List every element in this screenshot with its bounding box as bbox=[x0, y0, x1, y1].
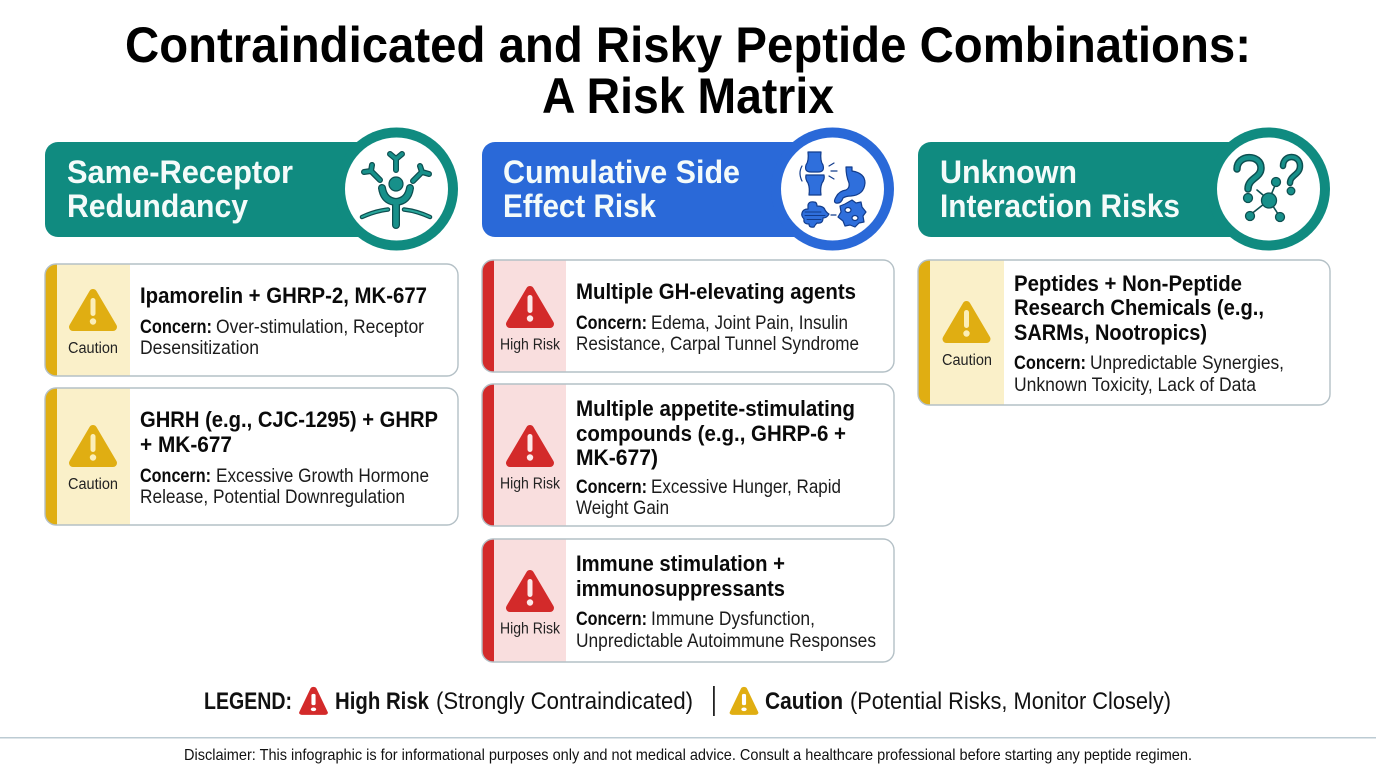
icon: question marks and molecule bbox=[1237, 157, 1300, 222]
card: GHRH + GHRP + MK-677: Excessive Growth Hormone bbox=[216, 466, 429, 487]
card: GHRH + GHRP + MK-677: GHRH (e.g., CJC-1295) + GHRP bbox=[140, 407, 438, 432]
card: GHRH + GHRP + MK-677: + MK-677 bbox=[140, 432, 232, 457]
card: GHRH + GHRP + MK-677 bbox=[45, 388, 458, 525]
panel: unknown interaction risks bbox=[918, 128, 1330, 405]
title bbox=[125, 17, 1251, 124]
card: peptides + non-peptide research chemicals: Unpredictable Synergies, bbox=[1090, 353, 1284, 374]
heading: unknown interaction risks: Interaction Risks bbox=[940, 188, 1180, 224]
card: immune stimulation + immunosuppressants: Immune stimulation + bbox=[576, 551, 785, 576]
card: multiple GH-elevating agents: Concern: bbox=[576, 313, 647, 334]
card: multiple appetite-stimulating compounds bbox=[482, 384, 894, 526]
card: peptides + non-peptide research chemicals: Unknown Toxicity, Lack of Data bbox=[1014, 375, 1256, 396]
legend: (Strongly Contraindicated) bbox=[436, 688, 693, 715]
icon: caution triangle bbox=[73, 429, 113, 463]
card: immune stimulation + immunosuppressants: immunosuppressants bbox=[576, 576, 785, 601]
title: Contraindicated and Risky Peptide Combinations: bbox=[125, 17, 1251, 73]
icon: joint, stomach, intestine and cell bbox=[800, 152, 866, 227]
legend: (Potential Risks, Monitor Closely) bbox=[850, 688, 1171, 715]
card: peptides + non-peptide research chemicals: SARMs, Nootropics) bbox=[1014, 320, 1207, 345]
card: Ipamorelin + GHRP-2, MK-677: Desensitization bbox=[140, 338, 259, 359]
card: Ipamorelin + GHRP-2, MK-677 bbox=[45, 264, 458, 376]
card: multiple GH-elevating agents: Multiple GH-elevating agents bbox=[576, 279, 856, 304]
disclaimer: Disclaimer: This infographic is for informational purposes only and not medical advice. Consult a healthcare professional before starting any peptide regimen. bbox=[184, 747, 1192, 764]
icon: high risk legend triangle bbox=[302, 689, 325, 713]
icon: high risk triangle bbox=[510, 574, 550, 608]
card: multiple GH-elevating agents: High Risk bbox=[500, 336, 560, 354]
heading: unknown interaction risks bbox=[918, 128, 1330, 250]
card: multiple GH-elevating agents: Edema, Joint Pain, Insulin bbox=[651, 313, 848, 334]
icon: high risk triangle bbox=[510, 290, 550, 324]
heading: same-receptor redundancy: Same-Receptor bbox=[67, 154, 293, 190]
card: peptides + non-peptide research chemicals: Caution bbox=[942, 352, 992, 369]
icon: receptor with binding ligands bbox=[362, 154, 430, 225]
heading: cumulative side effect risk: Cumulative Side bbox=[503, 154, 740, 190]
icon: caution legend triangle bbox=[733, 689, 755, 713]
card: immune stimulation + immunosuppressants bbox=[482, 539, 894, 662]
card: immune stimulation + immunosuppressants: Unpredictable Autoimmune Responses bbox=[576, 631, 876, 652]
icon: caution triangle bbox=[73, 293, 113, 327]
card: immune stimulation + immunosuppressants: Concern: bbox=[576, 609, 647, 630]
card: immune stimulation + immunosuppressants: Immune Dysfunction, bbox=[651, 609, 815, 630]
card: multiple appetite-stimulating compounds: compounds (e.g., GHRP-6 + bbox=[576, 421, 846, 446]
legend: LEGEND: bbox=[204, 688, 292, 715]
card: peptides + non-peptide research chemicals: Concern: bbox=[1014, 353, 1086, 374]
heading: same-receptor redundancy bbox=[45, 128, 458, 250]
card: multiple GH-elevating agents bbox=[482, 260, 894, 372]
card: Ipamorelin + GHRP-2, MK-677: Over-stimulation, Receptor bbox=[216, 317, 425, 338]
card: multiple appetite-stimulating compounds: Weight Gain bbox=[576, 498, 669, 519]
card: multiple appetite-stimulating compounds: Concern: bbox=[576, 477, 647, 498]
card: immune stimulation + immunosuppressants: High Risk bbox=[500, 620, 560, 638]
heading: cumulative side effect risk: Effect Risk bbox=[503, 188, 656, 224]
heading: same-receptor redundancy: Redundancy bbox=[67, 188, 248, 224]
legend bbox=[204, 686, 1171, 716]
legend: High Risk bbox=[335, 688, 430, 715]
card: peptides + non-peptide research chemicals bbox=[918, 260, 1330, 405]
card: peptides + non-peptide research chemicals: Peptides + Non-Peptide bbox=[1014, 271, 1242, 296]
card: Ipamorelin + GHRP-2, MK-677: Concern: bbox=[140, 317, 212, 338]
card: multiple appetite-stimulating compounds: High Risk bbox=[500, 476, 560, 492]
title: A Risk Matrix bbox=[542, 68, 834, 124]
panel: same-receptor redundancy bbox=[45, 128, 458, 525]
card: GHRH + GHRP + MK-677: Caution bbox=[68, 476, 118, 493]
heading: unknown interaction risks: Unknown bbox=[940, 154, 1077, 190]
icon: caution triangle bbox=[946, 305, 986, 339]
panel: cumulative side effect risk bbox=[482, 128, 894, 662]
icon: high risk triangle bbox=[510, 429, 550, 463]
card: Ipamorelin + GHRP-2, MK-677: Caution bbox=[68, 340, 118, 357]
card: Ipamorelin + GHRP-2, MK-677: Ipamorelin + GHRP-2, MK-677 bbox=[140, 283, 427, 308]
card: multiple appetite-stimulating compounds: MK-677) bbox=[576, 445, 658, 470]
card: multiple appetite-stimulating compounds: Multiple appetite-stimulating bbox=[576, 396, 855, 421]
card: multiple GH-elevating agents: Resistance, Carpal Tunnel Syndrome bbox=[576, 334, 859, 355]
heading: cumulative side effect risk bbox=[482, 128, 894, 250]
card: GHRH + GHRP + MK-677: Release, Potential Downregulation bbox=[140, 487, 405, 508]
legend: Caution bbox=[765, 688, 843, 715]
card: multiple appetite-stimulating compounds: Excessive Hunger, Rapid bbox=[651, 477, 841, 498]
card: GHRH + GHRP + MK-677: Concern: bbox=[140, 466, 211, 487]
card: peptides + non-peptide research chemicals: Research Chemicals (e.g., bbox=[1014, 295, 1264, 320]
